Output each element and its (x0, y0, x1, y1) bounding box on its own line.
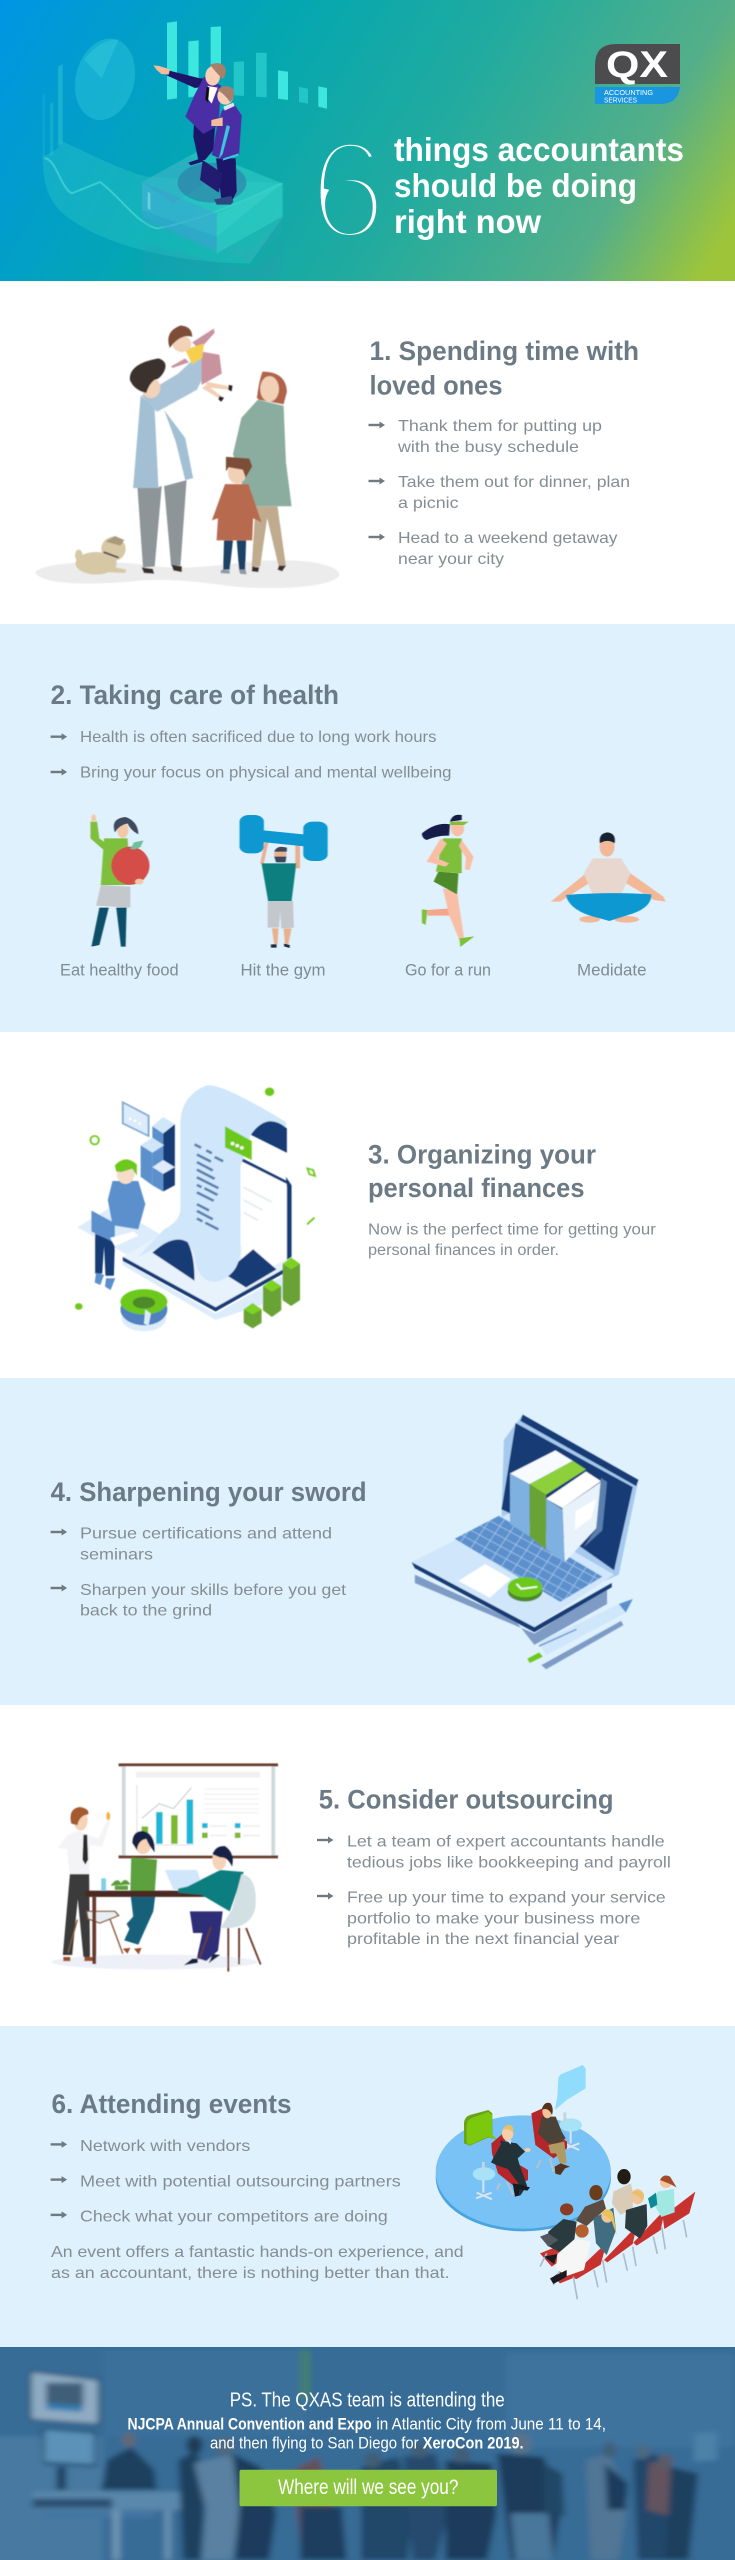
bullet list: Bring your focus on physical and mental wellbeing (80, 765, 452, 782)
round stage (436, 2115, 611, 2231)
bullet list (368, 418, 630, 568)
icon: man lifting dumbbell (240, 815, 328, 948)
health activity icons (90, 814, 666, 948)
panel: 4 sharpening your sword (0, 1378, 735, 1705)
announcement text (128, 2390, 606, 2452)
logo: QX Accounting Services: ACCOUNTING (604, 88, 653, 97)
bullet list: Free up your time to expand your service (347, 1890, 666, 1907)
boy (212, 457, 262, 575)
speech bubbles (464, 2065, 586, 2146)
bullet list: Pursue certifications and attend (80, 1525, 332, 1542)
donut chart (120, 1289, 167, 1331)
hero illustration: businessmen on isometric chart platform (43, 21, 327, 277)
illustration: laptop with books and pen (412, 1415, 638, 1669)
title: should be doing (394, 167, 637, 204)
icon: woman running (422, 815, 474, 947)
bullet list: seminars (80, 1546, 153, 1563)
books (510, 1450, 607, 1562)
illustration: family with dog (35, 325, 339, 588)
dog (75, 536, 127, 575)
bullet list: near your city (398, 551, 504, 568)
side table left (473, 2162, 495, 2199)
bullet list (51, 2138, 401, 2226)
text block: personal finances in order. (368, 1242, 559, 1259)
large thin numeral six: 6 (309, 111, 387, 268)
floor shadows (52, 1955, 258, 1969)
father (130, 352, 213, 574)
isometric blocks (141, 1117, 175, 1192)
speaker one seated (491, 2125, 531, 2197)
bullet list: Take them out for dinner, plan (398, 474, 630, 491)
text block (51, 2244, 464, 2282)
check badge (508, 1577, 542, 1602)
panel: 5 consider outsourcing (0, 1705, 735, 2026)
businessman pointing (153, 63, 226, 165)
panel: 2 taking care of health (0, 624, 735, 1032)
table with plant and water glass (85, 1878, 223, 1964)
illustration: receipt, laptop and person (75, 1085, 315, 1331)
laptop base (412, 1514, 614, 1632)
floor mat (77, 1206, 173, 1261)
text block: Now is the perfect time for getting your (368, 1222, 656, 1238)
heading: 4. Sharpening your sword (51, 1477, 367, 1507)
pie chart (67, 32, 143, 127)
bullet list: Health is often sacrificed due to long work hours (80, 729, 436, 746)
announcement text: PS. The QXAS team is attending the (230, 2390, 505, 2412)
bullet list (51, 729, 451, 782)
heading (368, 1139, 596, 1203)
text block: An event offers a fantastic hands-on experience, and (51, 2244, 464, 2261)
heading: personal finances (368, 1173, 584, 1203)
green bars (244, 1258, 300, 1328)
heading (370, 336, 639, 400)
icon: woman with apple (90, 814, 150, 947)
bullet list (317, 1834, 671, 1948)
heading: 5. Consider outsourcing (319, 1785, 614, 1815)
ground shadow (35, 560, 339, 588)
audience members (540, 2169, 677, 2284)
text block: as an accountant, there is nothing better than that. (51, 2265, 450, 2282)
heading: 3. Organizing your (368, 1139, 596, 1169)
left chair (68, 1911, 123, 1954)
announcement text: NJCPA Annual Convention and Expo (128, 2414, 372, 2433)
captions: Go for a run (405, 961, 491, 980)
captions (60, 961, 646, 980)
curved chart band (43, 64, 283, 277)
bullet list: Sharpen your skills before you get (80, 1582, 347, 1599)
bullet list: Let a team of expert accountants handle (347, 1834, 665, 1851)
logo: QX Accounting Services: QX (606, 44, 668, 85)
illustration: panel discussion on round stage (436, 2065, 695, 2299)
panel: 1 spending time with loved ones (0, 281, 735, 624)
laptop with receipt (123, 1085, 300, 1320)
bullet list: profitable in the next financial year (347, 1931, 620, 1948)
teal chair (199, 1874, 261, 1972)
bullet list: back to the grind (80, 1602, 212, 1619)
captions: Eat healthy food (60, 961, 179, 980)
chat bubbles (123, 1102, 252, 1160)
title: things accountants (394, 131, 684, 168)
title (394, 131, 684, 240)
bullet list: tedious jobs like bookkeeping and payroll (347, 1854, 671, 1872)
panel: 3 organizing your personal finances (0, 1032, 735, 1378)
captions: Medidate (577, 961, 646, 980)
captions: Hit the gym (240, 961, 326, 980)
side table right (559, 2112, 582, 2150)
panel: hero banner (0, 0, 735, 281)
bullet list: Meet with potential outsourcing partners (80, 2173, 401, 2190)
floating bar chart (167, 21, 327, 109)
button: where will we see you (240, 2470, 497, 2506)
child lifted in the air (168, 325, 232, 402)
bullet list: Head to a weekend getaway (398, 530, 618, 547)
blurred expo photo background (0, 2333, 735, 2560)
person with laptop (91, 1159, 145, 1290)
heading: 2. Taking care of health (51, 680, 339, 710)
audience seats (540, 2192, 695, 2299)
businessman with briefcase (200, 86, 242, 205)
bullet list: with the busy schedule (397, 439, 579, 456)
heading: 6. Attending events (52, 2089, 292, 2119)
logo: QX Accounting Services (595, 44, 680, 104)
title: right now (394, 203, 541, 240)
heading: loved ones (370, 370, 502, 400)
mother (233, 372, 292, 572)
icon: man meditating (551, 832, 666, 923)
presentation board (119, 1763, 278, 1858)
bullet list: Thank them for putting up (398, 418, 602, 435)
bullet list: Network with vendors (80, 2138, 250, 2155)
heading: 1. Spending time with (370, 336, 639, 366)
announcement text: and then flying to San Diego for (210, 2433, 419, 2452)
bullet list: Check what your competitors are doing (80, 2208, 388, 2226)
pen (527, 1599, 633, 1669)
bullet list: portfolio to make your business more (347, 1910, 640, 1927)
announcement text: XeroCon 2019. (423, 2433, 524, 2452)
announcement text: in Atlantic City from June 11 to 14, (376, 2414, 606, 2433)
woman seated (120, 1831, 157, 1955)
panel: 6 attending events (0, 2026, 735, 2347)
bullet list: a picnic (398, 495, 458, 512)
logo: QX Accounting Services: SERVICES (604, 96, 637, 104)
isometric platform (142, 150, 282, 253)
illustration: office meeting with chart board (52, 1763, 278, 1972)
laptop screen (502, 1415, 638, 1581)
speaker two seated (531, 2103, 570, 2175)
button: where will we see you: Where will we see you? (278, 2476, 458, 2499)
panel: footer call to action (0, 2333, 735, 2560)
decorative dots (75, 1088, 315, 1310)
text block (368, 1222, 656, 1259)
man on laptop (165, 1846, 244, 1965)
presenter (58, 1807, 111, 1961)
laptop shadow (415, 1575, 607, 1645)
bullet list (51, 1525, 347, 1619)
